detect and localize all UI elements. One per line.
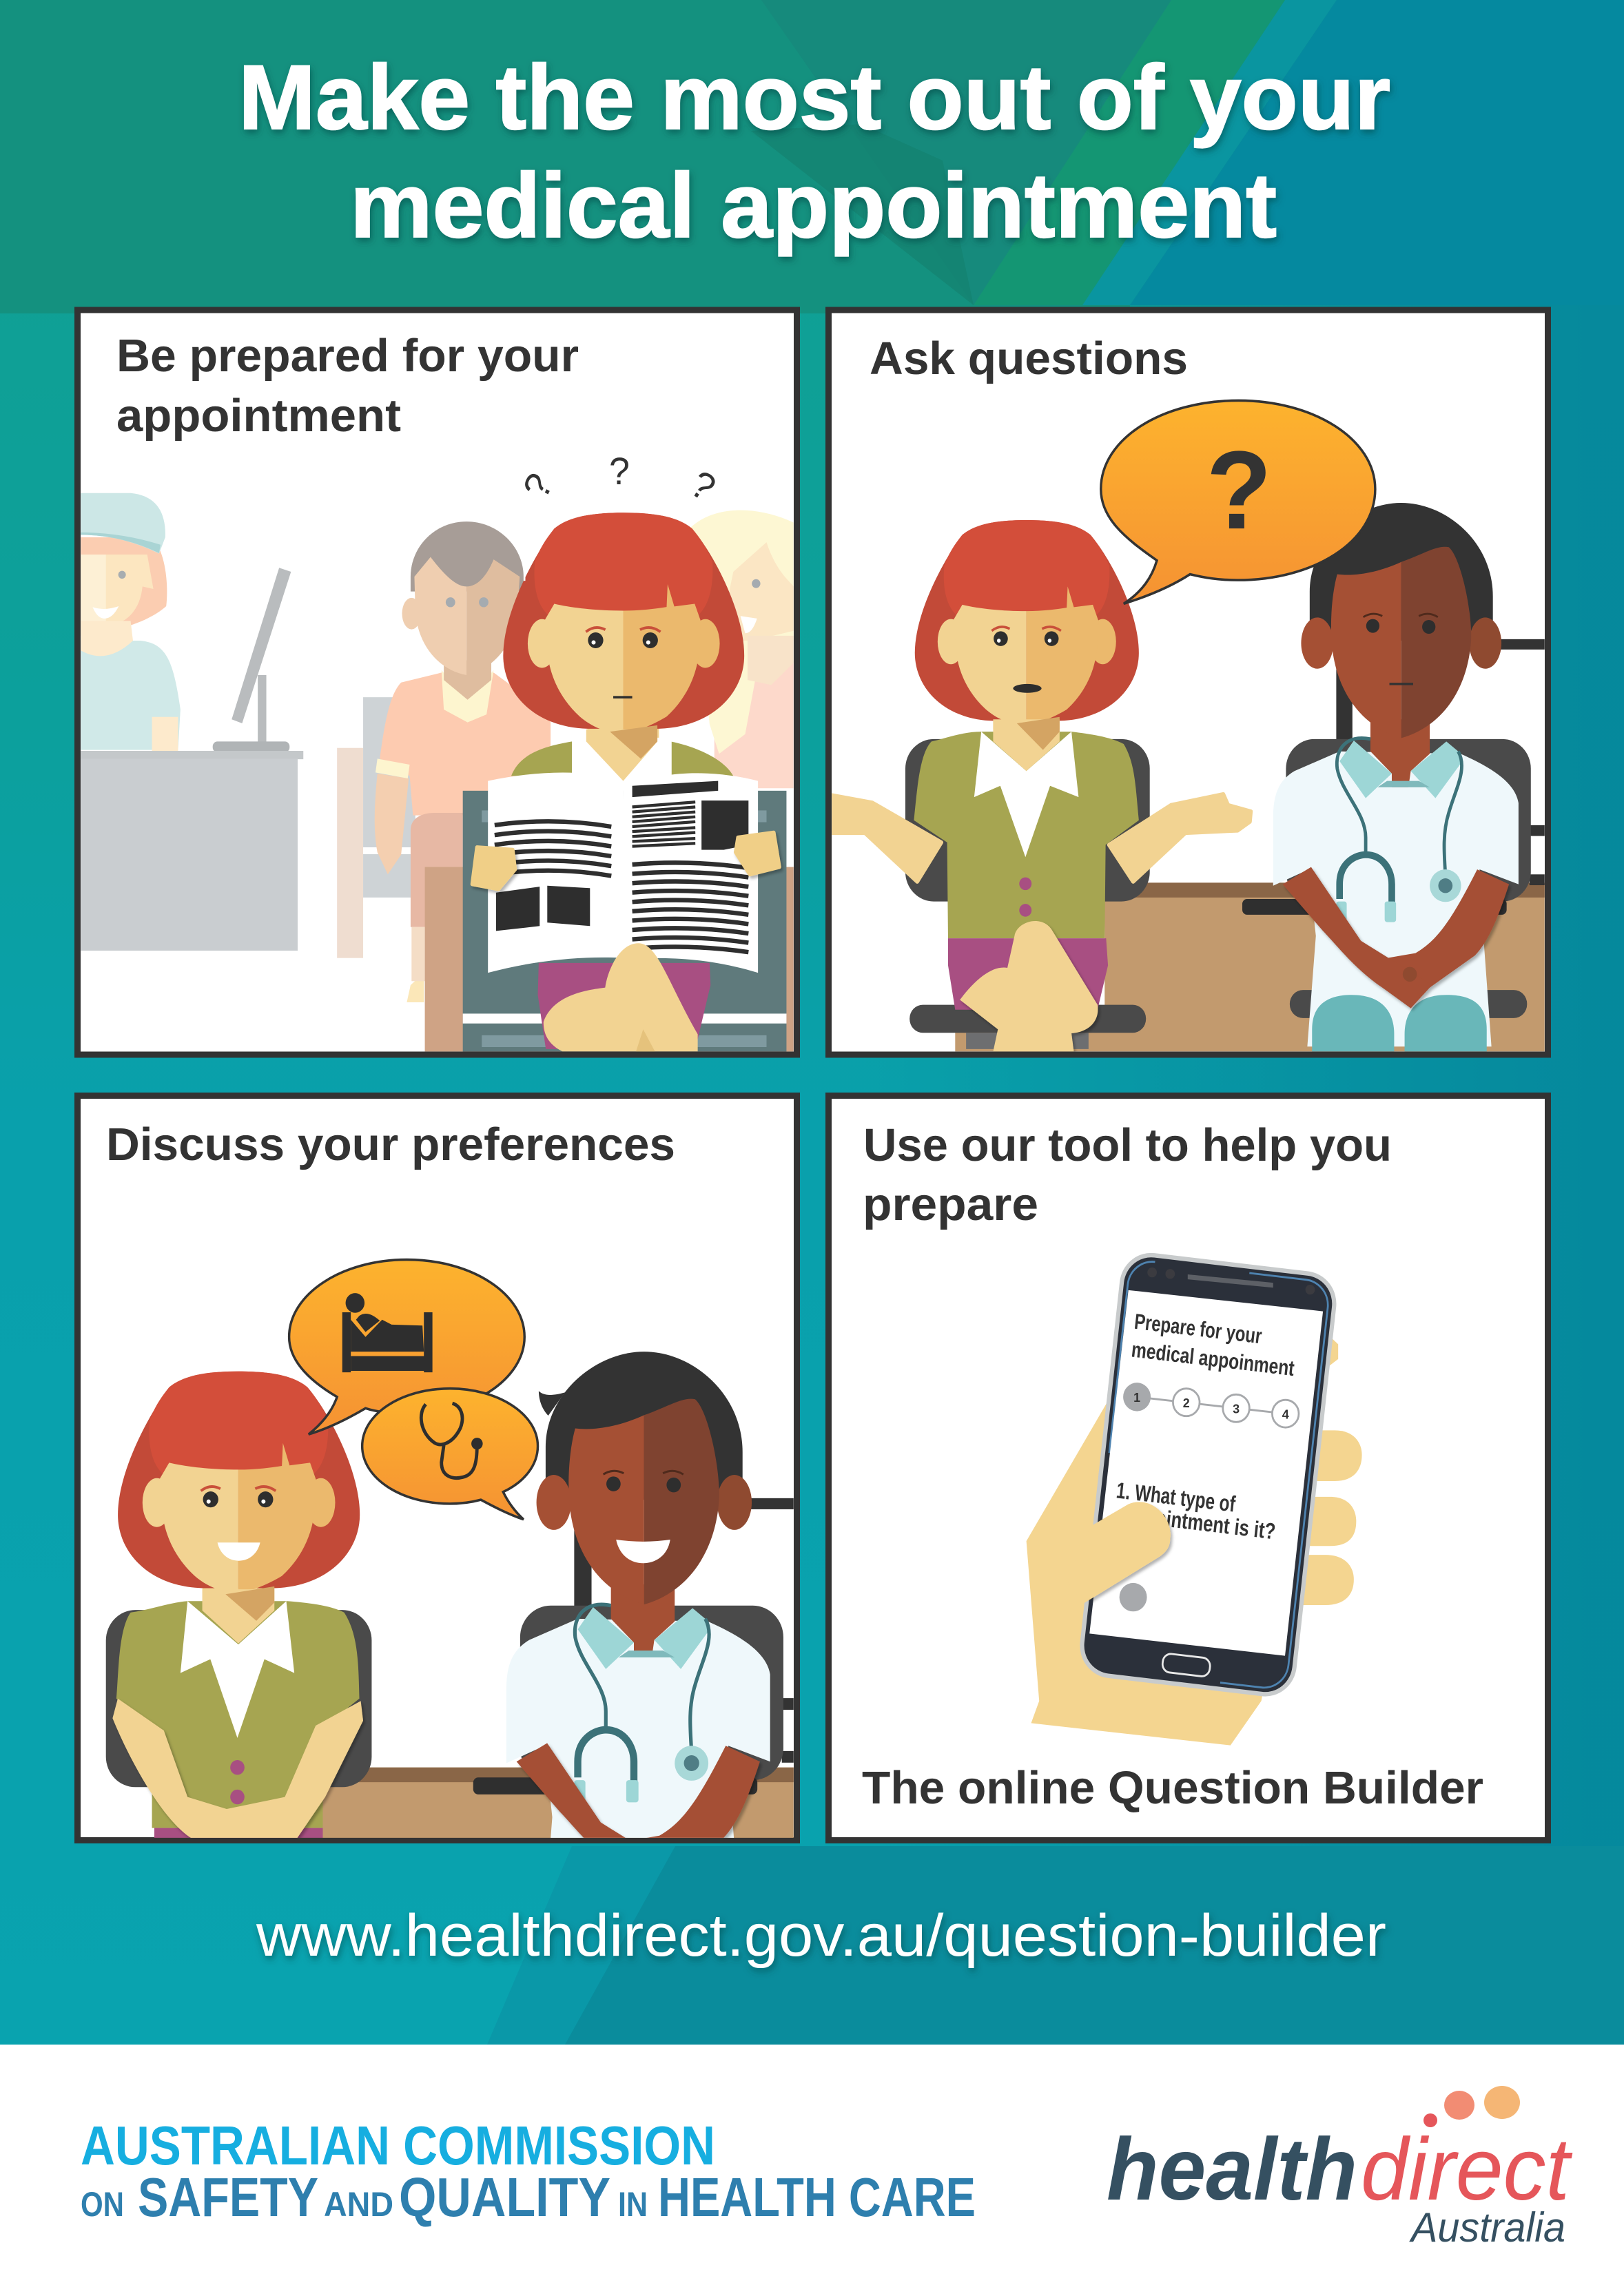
logo: australian commission: IN — [618, 2185, 648, 2224]
skirt — [948, 938, 1108, 1010]
waiting room chairs — [337, 697, 415, 958]
illustration: patient asks doctor — [832, 400, 1589, 1051]
logo: australian commission — [81, 2115, 976, 2228]
logo: healthdirect: health — [1107, 2120, 1357, 2219]
illustration: hand holding phone — [1027, 1252, 1362, 1746]
panel: be prepared — [77, 310, 796, 1055]
logo: australian commission: HEALTH CARE — [658, 2166, 976, 2228]
title: medical appointment — [350, 155, 1277, 257]
panel: ask questions — [828, 310, 1589, 1055]
older man — [375, 521, 551, 1002]
desk — [955, 882, 1546, 1051]
logo: australian commission: QUALITY — [399, 2166, 610, 2228]
newspaper — [488, 772, 626, 973]
nurse at reception — [81, 493, 181, 752]
footer — [0, 2045, 1624, 2296]
legs — [544, 943, 698, 1051]
title — [238, 47, 1390, 257]
thumb — [1067, 1502, 1171, 1604]
heading: Discuss your preferences — [106, 1119, 675, 1170]
phone screen content: 4 — [1282, 1407, 1290, 1421]
woman — [106, 1372, 371, 1839]
heading: Use our tool to help you — [863, 1119, 1392, 1171]
question marks — [525, 457, 715, 497]
speech bubble: stethoscope — [362, 1389, 538, 1520]
website url: www.healthdirect.gov.au/question-builder — [256, 1903, 1386, 1969]
caption: The online Question Builder — [862, 1762, 1483, 1814]
blouse — [511, 741, 733, 776]
question marks: ? — [609, 449, 630, 493]
phone screen content: Prepare for your — [1133, 1309, 1263, 1348]
arms — [832, 794, 1251, 882]
question marks: ? — [515, 466, 561, 506]
monitor and desk — [81, 568, 303, 951]
legs — [960, 921, 1098, 1051]
phone screen content: 1 — [1133, 1390, 1140, 1405]
doctor — [473, 1352, 845, 1941]
neck — [586, 730, 657, 781]
heading: appointment — [116, 390, 401, 442]
doctor — [1242, 503, 1545, 1051]
question marks: ? — [683, 462, 723, 510]
arms — [112, 1699, 363, 1839]
logo: healthdirect: Australia — [1409, 2204, 1565, 2251]
heading — [863, 1119, 1392, 1230]
heading: Ask questions — [870, 333, 1188, 384]
phone screen content: 3 — [1233, 1401, 1240, 1416]
illustration: waiting room — [81, 449, 795, 1052]
title: Make the most out of your — [238, 47, 1390, 149]
panel: use our tool — [828, 1095, 1548, 1841]
blonde woman — [690, 510, 794, 788]
heading: Be prepared for your — [116, 330, 579, 382]
front chair — [425, 791, 795, 1052]
speech bubble: hospital bed — [289, 1260, 524, 1434]
logo: australian commission: AND — [324, 2185, 393, 2224]
panel: discuss preferences — [77, 1095, 845, 1941]
desk — [322, 1768, 797, 1841]
mouth — [613, 696, 633, 699]
logo: australian commission: SAFETY — [138, 2166, 318, 2228]
phone screen content: 1. What type of — [1115, 1478, 1237, 1517]
logo: australian commission: AUSTRALIAN COMMISSION — [81, 2115, 715, 2176]
speech bubble: question mark: ? — [1206, 428, 1272, 552]
woman reading — [472, 513, 779, 1051]
phone screen content: 2 — [1183, 1396, 1190, 1410]
skirt — [538, 963, 710, 1049]
hand — [1027, 1334, 1362, 1746]
phone screen content: appointment is it? — [1123, 1501, 1277, 1544]
woman — [832, 520, 1251, 1051]
phone screen content — [1115, 1309, 1299, 1611]
heading: prepare — [863, 1179, 1038, 1230]
illustration: discussion — [106, 1260, 845, 1941]
logo: australian commission: ON — [81, 2185, 124, 2224]
phone — [1079, 1252, 1337, 1697]
phone screen content: medical appoinment — [1130, 1337, 1295, 1380]
logo: healthdirect — [1107, 2086, 1572, 2251]
speech bubble: question mark — [1101, 400, 1375, 603]
hands — [472, 833, 779, 889]
logo: healthdirect: direct — [1361, 2120, 1572, 2219]
heading — [116, 330, 579, 442]
